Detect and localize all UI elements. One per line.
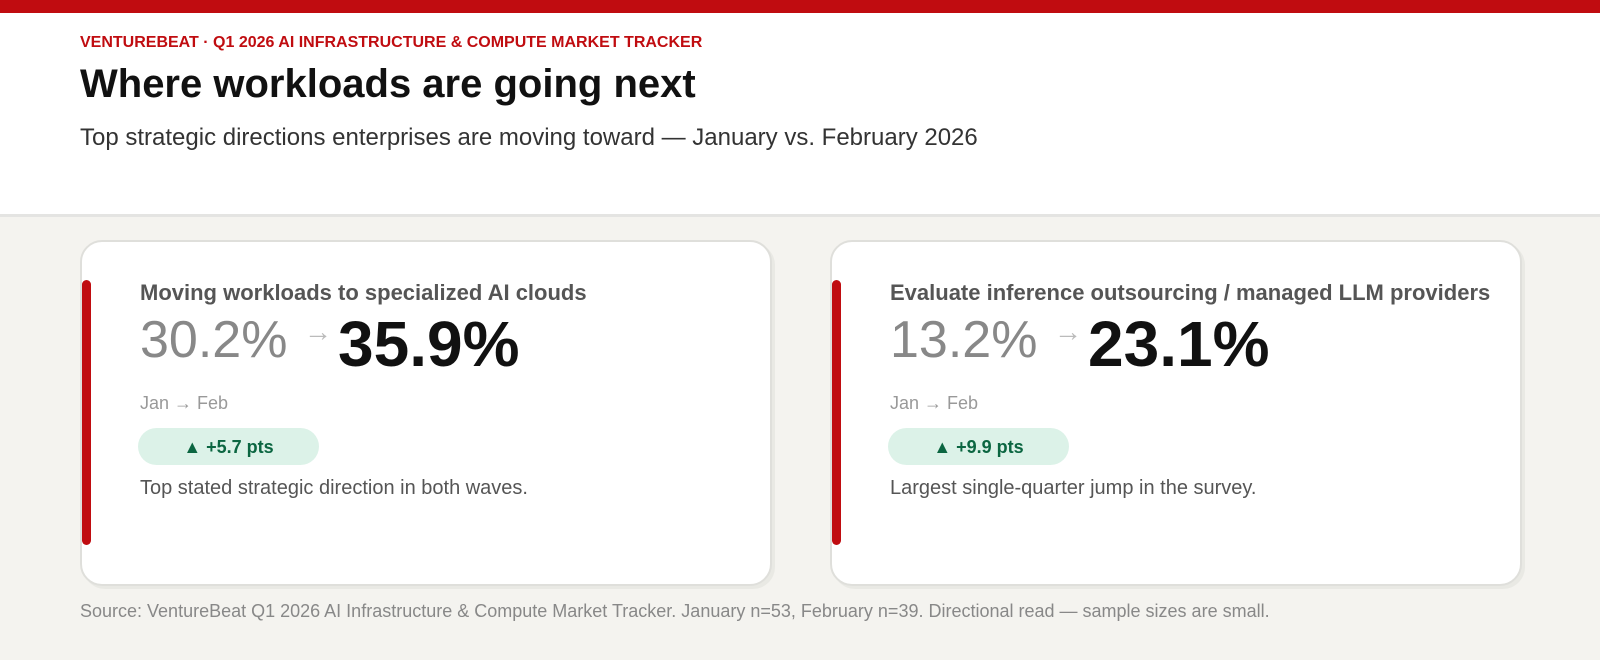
header band: [0, 0, 1600, 217]
January value: 13.2%: [890, 311, 1037, 369]
accent bar: [82, 280, 91, 545]
header rule: [0, 214, 1600, 217]
change badge: [888, 428, 1069, 465]
period label: Jan → Feb: [140, 393, 228, 413]
February value: 35.9%: [338, 308, 519, 380]
subtitle: Top strategic directions enterprises are moving toward — January vs. February 2026: [80, 124, 978, 151]
panel: inference outsourcing: [830, 240, 1522, 586]
top accent bar: [0, 0, 1600, 13]
source note: Source: VentureBeat Q1 2026 AI Infrastructure & Compute Market Tracker. January n=53, February n=39. Directional read — sample sizes are small.: [80, 601, 1270, 621]
note: Largest single-quarter jump in the survey.: [890, 477, 1256, 499]
arrow: →: [304, 316, 332, 347]
eyebrow: VENTUREBEAT · Q1 2026 AI INFRASTRUCTURE & COMPUTE MARKET TRACKER: [80, 34, 702, 51]
arrow: →: [1054, 316, 1082, 347]
title: Where workloads are going next: [80, 62, 696, 106]
accent bar: [832, 280, 841, 545]
change badge: ▲ +5.7 pts: [183, 437, 274, 457]
January value: 30.2%: [140, 311, 287, 369]
panel: specialized AI clouds: [80, 240, 772, 586]
change badge: ▲ +9.9 pts: [933, 437, 1024, 457]
card label: Evaluate inference outsourcing / managed LLM providers: [890, 280, 1490, 305]
period label: Jan → Feb: [890, 393, 978, 413]
note: Top stated strategic direction in both waves.: [140, 477, 528, 499]
change badge: [138, 428, 319, 465]
February value: 23.1%: [1088, 308, 1269, 380]
card label: Moving workloads to specialized AI clouds: [140, 280, 587, 305]
